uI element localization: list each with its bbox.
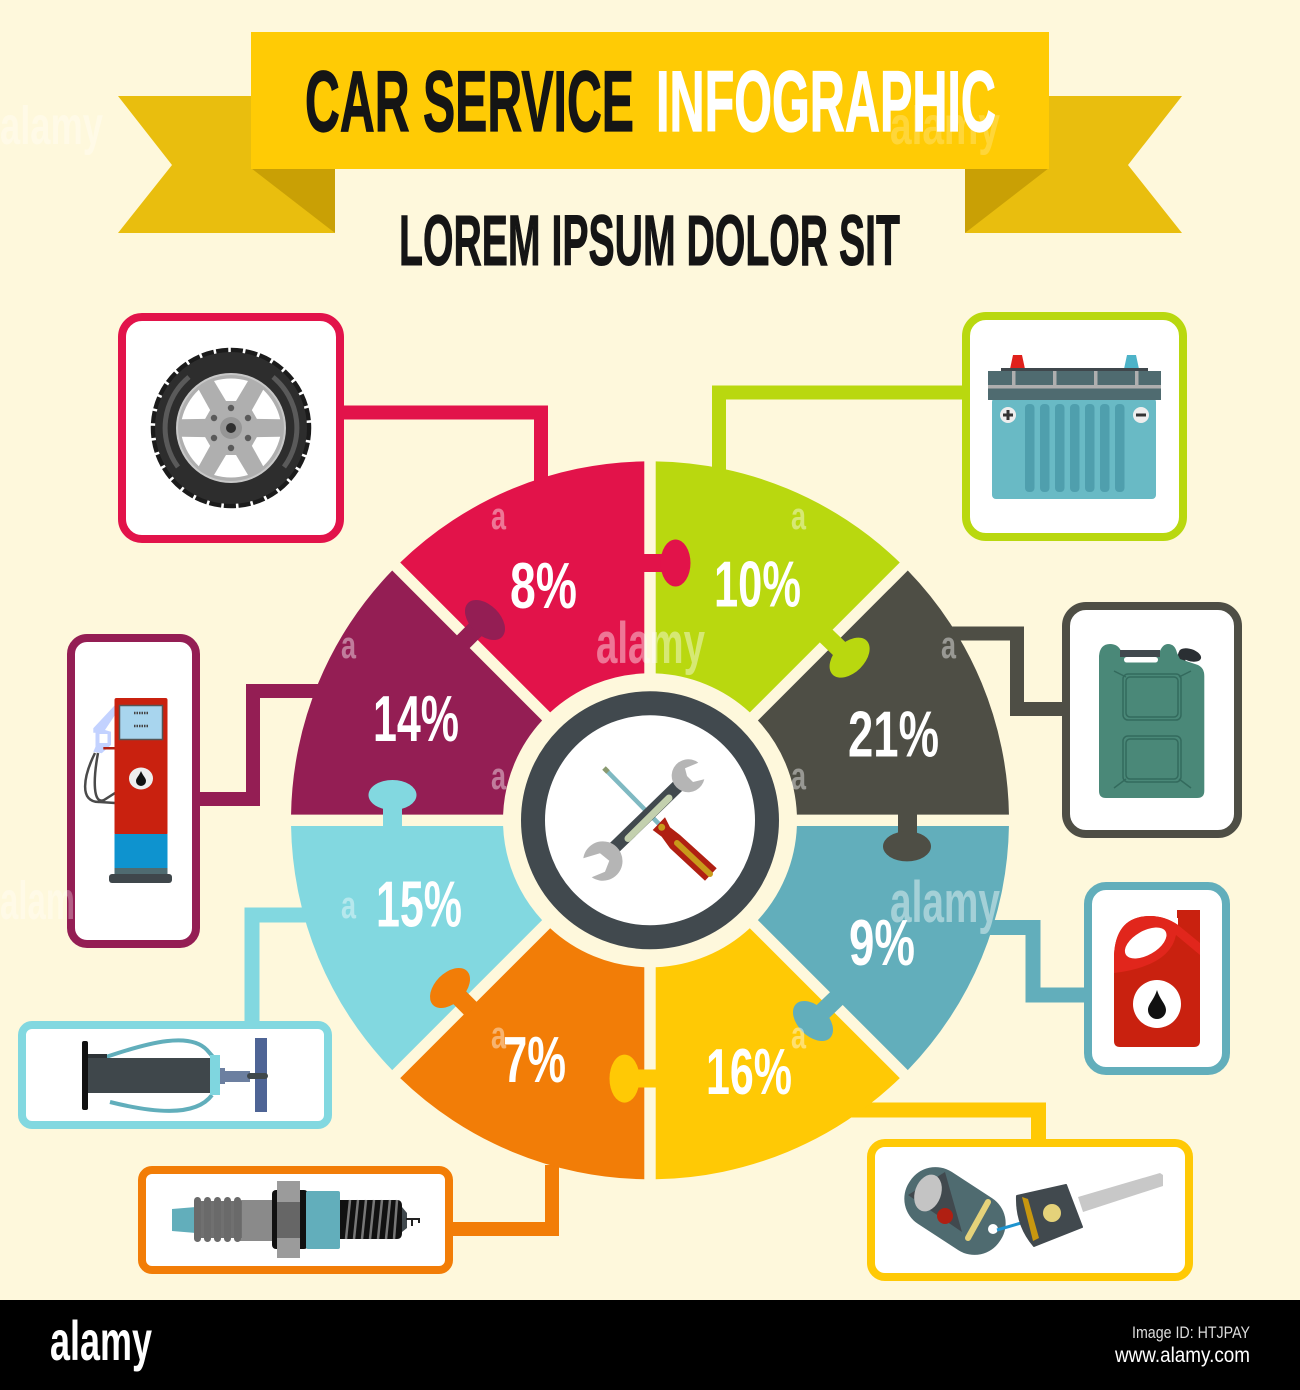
- label 10%: 10%: [714, 548, 801, 620]
- icon: battery: [988, 355, 1161, 499]
- segment 16%: [656, 928, 900, 1179]
- banner right fold: [965, 168, 1049, 233]
- segment 14%: [291, 570, 542, 815]
- puzzle knob: yellow: [610, 1055, 658, 1103]
- icon: fuel dispenser: [85, 698, 172, 883]
- key head: [1017, 1185, 1082, 1246]
- center hub: [533, 703, 767, 937]
- puzzle knob: orange: [422, 960, 478, 1016]
- label 21%: 21%: [848, 698, 939, 770]
- title banner: [118, 32, 1182, 233]
- connector: oil: [990, 928, 1088, 995]
- label 9%: 9%: [849, 906, 915, 979]
- wrench upper head: [672, 759, 704, 792]
- subtitle: LOREM IPSUM DOLOR SIT: [399, 202, 900, 281]
- segment 8%: [400, 461, 644, 712]
- panel: car keys: [871, 1143, 1189, 1277]
- footer logo: alamy: [50, 1309, 152, 1372]
- connector: spark plug: [449, 1165, 552, 1229]
- wrench handle: [614, 783, 681, 848]
- watermark: a: [791, 496, 807, 538]
- screwdriver collar dot: [658, 824, 665, 831]
- label 14%: 14%: [373, 682, 459, 755]
- segment 21%: [758, 570, 1009, 815]
- puzzle knob: red: [640, 540, 690, 586]
- title: car service: CAR SERVICE: [305, 54, 634, 150]
- website: www.alamy.com: [1114, 1344, 1250, 1367]
- watermark: a: [791, 756, 807, 798]
- pie segments: [291, 461, 1009, 1179]
- watermark: alamy: [0, 96, 103, 156]
- label 16%: 16%: [706, 1035, 792, 1108]
- connector: battery: [719, 392, 966, 480]
- key fob: [893, 1156, 1017, 1266]
- watermark: a: [941, 625, 957, 667]
- icon: hand pump: [82, 1038, 268, 1112]
- watermark: [0, 96, 1000, 1057]
- puzzle knob: light blue: [368, 780, 416, 829]
- pie chart: [291, 461, 1009, 1179]
- banner right tail: [965, 96, 1182, 233]
- banner left fold: [251, 168, 335, 233]
- icon: tyre: [154, 351, 308, 505]
- label 7%: 7%: [503, 1023, 566, 1096]
- watermark: a: [491, 756, 507, 798]
- icon: car keys: [893, 1156, 1163, 1266]
- connector: jerry can: [940, 634, 1066, 709]
- panel: battery: [966, 316, 1183, 537]
- banner ribbon: [251, 32, 1049, 169]
- panel: tyre: [122, 317, 340, 539]
- banner left tail: [118, 96, 335, 233]
- icon: jerry can: [1099, 644, 1204, 798]
- title: infographic: INFOGRAPHIC: [656, 54, 996, 150]
- segment 15%: [291, 826, 542, 1070]
- puzzle knob: teal: [785, 993, 841, 1049]
- wrench lower head: [583, 841, 623, 881]
- watermark: a: [491, 1015, 507, 1057]
- percentage labels: [373, 548, 939, 1108]
- panel: oil canister: [1088, 886, 1226, 1071]
- segment 9%: [758, 826, 1009, 1070]
- icon: spark plug: [172, 1181, 419, 1258]
- watermark: alamy: [596, 611, 705, 676]
- puzzle knob: green: [822, 630, 877, 685]
- watermark: alam: [0, 871, 75, 931]
- puzzle knob: purple: [457, 592, 513, 648]
- panel: spark plug: [142, 1170, 449, 1270]
- watermark: a: [491, 496, 507, 538]
- icon: oil canister: [1114, 910, 1200, 1047]
- screwdriver handle: [653, 817, 717, 881]
- connector: fuel dispenser: [196, 691, 330, 799]
- screwdriver stripe: [677, 843, 710, 874]
- wrench inset: [628, 798, 669, 838]
- segment 10%: [656, 461, 900, 712]
- watermark: a: [341, 885, 357, 927]
- watermark: a: [791, 1015, 807, 1057]
- key blade: [1078, 1173, 1163, 1212]
- rim windows: [180, 378, 282, 478]
- panel: hand pump: [22, 1025, 328, 1125]
- puzzle knob: dark: [883, 810, 931, 861]
- segment 7%: [400, 928, 644, 1179]
- screwdriver shaft: [605, 769, 660, 825]
- watermark: alamy: [890, 870, 1000, 935]
- connector: tyre: [340, 412, 541, 490]
- screwdriver tip: [604, 768, 608, 772]
- connector: pump: [252, 915, 320, 1025]
- icon: crossed screwdriver and wrench: [583, 759, 717, 881]
- panel: fuel dispenser: [71, 638, 196, 944]
- connector: keys: [850, 1110, 1038, 1143]
- label 15%: 15%: [376, 868, 462, 940]
- image id: Image ID: HTJPAY: [1132, 1323, 1250, 1342]
- footer bar: [0, 1300, 1300, 1390]
- hub ring: [533, 703, 767, 937]
- watermark: a: [341, 625, 357, 667]
- panel: jerry can: [1066, 606, 1238, 834]
- label 8%: 8%: [510, 549, 577, 622]
- watermark: alamy: [890, 96, 1000, 156]
